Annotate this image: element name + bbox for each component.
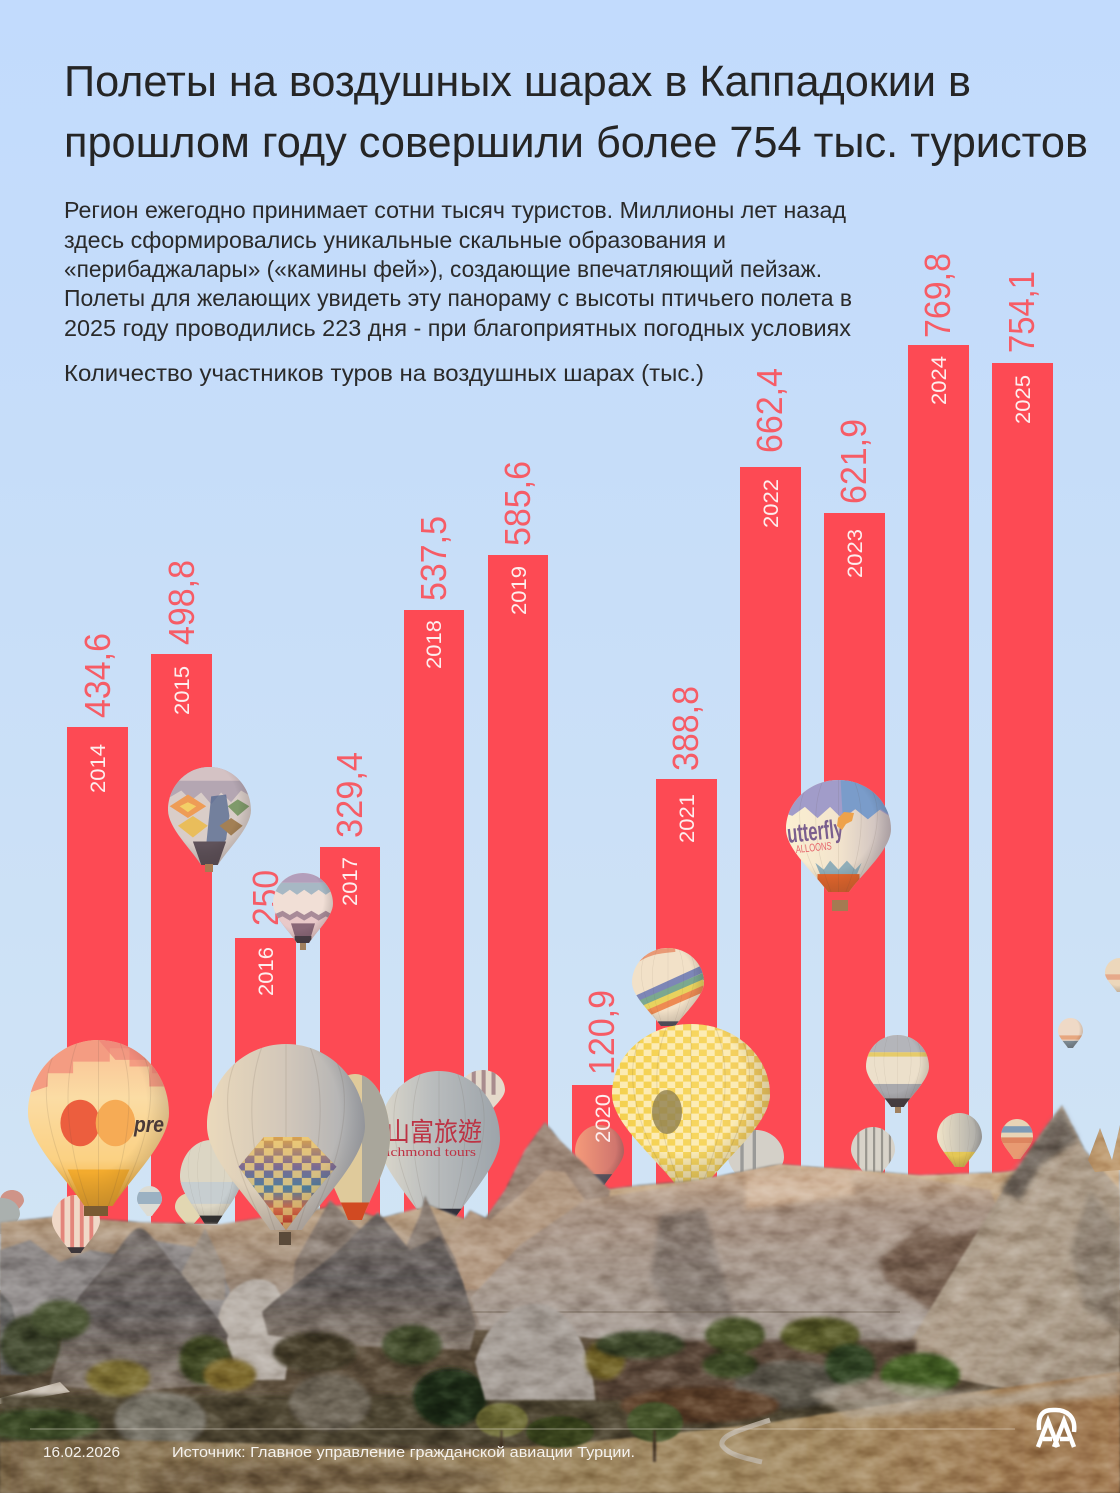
bar chart: value labels: 754,1 <box>1001 271 1042 353</box>
balloon: cream behind large <box>175 1194 200 1224</box>
intro text block: здесь сформировались уникальные скальные образования и <box>64 227 726 253</box>
balloon: rainbow stripes <box>632 948 704 1026</box>
balloon: striped small behind Chinese balloon <box>465 1070 505 1108</box>
massif dark shadows <box>650 1210 735 1325</box>
balloon basket <box>895 1107 901 1113</box>
balloon basket <box>84 1206 108 1216</box>
balloon: far left edge pink <box>0 1190 24 1209</box>
valley base <box>0 1290 1120 1493</box>
balloon basket <box>205 864 213 872</box>
balloon: silver striped <box>851 1127 895 1173</box>
horizontal strata line <box>470 1311 900 1313</box>
bar chart: value labels: 388,8 <box>665 686 706 771</box>
balloon: large beige with mosaic <box>207 1044 365 1245</box>
balloon basket <box>279 1232 291 1245</box>
balloon: small pink right <box>1058 1018 1083 1048</box>
grey rocks left <box>0 1240 230 1320</box>
far ridge <box>0 1160 1120 1330</box>
title: прошлом году совершили более 754 тыс. туристов <box>64 118 1088 167</box>
bar chart: year labels: 2017 <box>339 857 362 906</box>
balloon: striped small left <box>52 1195 100 1253</box>
ground darker patch <box>140 1462 500 1493</box>
balloon: striped blue-orange <box>1001 1119 1033 1159</box>
balloon: small left striped tiny <box>137 1186 162 1216</box>
balloon: large partner behind beige <box>334 1074 390 1220</box>
large right cone <box>905 1105 1120 1395</box>
bar chart: bars <box>67 345 1053 1230</box>
intro text block: Регион ежегодно принимает сотни тысяч туристов. Миллионы лет назад <box>64 197 846 223</box>
trees in foreground <box>476 1402 683 1462</box>
bar chart: value labels: 621,9 <box>833 419 874 504</box>
bar chart: value labels: 585,6 <box>497 461 538 546</box>
ground light slabs <box>810 1372 1120 1418</box>
bar chart: year labels: 2022 <box>760 479 783 528</box>
balloon lettering small: ALLOONS <box>795 840 832 856</box>
intro text block: «перибаджалары» («камины фей»), создающие впечатляющий пейзаж. <box>64 256 822 282</box>
balloon: Butterfly <box>786 780 891 911</box>
intro text block: Полеты для желающих увидеть эту панораму с высоты птичьего полета в <box>64 285 852 311</box>
rock left edge <box>0 1292 28 1375</box>
pale sliver at far left <box>0 1382 70 1404</box>
bar chart: year labels: 2023 <box>844 529 867 578</box>
footer rule <box>30 1428 1015 1430</box>
central rock massif <box>470 1164 1010 1350</box>
balloon emblem <box>652 1090 682 1134</box>
balloon: yellow checked <box>612 1024 770 1184</box>
balloon: small far right, cut off by edge <box>1105 958 1120 992</box>
bar chart: value labels: 498,8 <box>161 560 202 645</box>
intro text block <box>64 197 852 341</box>
bar chart: value labels: 120,9 <box>581 990 622 1075</box>
year label 2020: 2020 <box>592 1094 615 1143</box>
bar chart: year labels: 2021 <box>676 794 699 843</box>
central rock lit tops <box>745 1170 855 1210</box>
bar chart: value labels: 537,5 <box>413 516 454 601</box>
vegetation right <box>0 1317 960 1441</box>
bar chart: year labels <box>87 356 1035 996</box>
spires center <box>470 1122 610 1280</box>
bar chart: value labels: 329,4 <box>329 752 370 838</box>
bar chart: value labels: 434,6 <box>77 633 118 718</box>
bar chart: value labels: 250 <box>245 870 286 926</box>
icon: AA logo <box>1038 1410 1074 1447</box>
dark cone group centre-left <box>262 1212 476 1350</box>
balloon: large orange pre <box>28 1040 169 1216</box>
pale dome <box>218 1279 295 1380</box>
bar chart: year labels: 2025 <box>1012 375 1035 424</box>
balloon: orange behind 2020 <box>575 1125 624 1185</box>
balloon: behind center rock <box>728 1130 784 1173</box>
landscape: rock formations and valley <box>0 1105 1120 1493</box>
chart subtitle: Количество участников туров на воздушных шарах (тыс.) <box>64 360 704 386</box>
title: Полеты на воздушных шарах в Каппадокии в <box>64 57 971 106</box>
balloon lettering latin: richmond tours <box>381 1144 476 1159</box>
dome rock centre <box>475 1304 596 1400</box>
balloon basket <box>832 900 848 911</box>
bar chart: year labels: 2016 <box>255 947 278 996</box>
dirt path <box>722 1420 770 1462</box>
balloon: Chinese text richmond tours <box>386 1071 500 1217</box>
bar chart: year labels: 2015 <box>171 666 194 715</box>
dark cone left <box>50 1228 228 1392</box>
balloon: pink scalloped <box>273 873 333 950</box>
balloon lettering: 山富旅遊 <box>386 1112 482 1149</box>
balloon: checked cream <box>866 1035 929 1113</box>
bar chart: year labels: 2014 <box>87 744 110 793</box>
balloon: patterned mosaic blue <box>168 767 251 872</box>
balloon: cream blue mid-left <box>180 1140 242 1224</box>
intro text block: 2025 году проводились 223 дня - при благоприятных погодных условиях <box>64 315 851 341</box>
bar chart: year labels: 2019 <box>508 566 531 615</box>
balloon: pale small striped <box>937 1113 982 1167</box>
balloon lettering: utterfly <box>786 813 845 849</box>
balloon basket <box>300 943 306 950</box>
right distant spires <box>1088 1125 1120 1172</box>
balloon: far left edge grey <box>0 1198 20 1234</box>
tan cones mid <box>290 1195 470 1310</box>
bar chart: value labels: 662,4 <box>749 368 790 453</box>
ground <box>0 1372 1120 1493</box>
bar chart: value labels: 769,8 <box>917 253 958 338</box>
bar chart: year labels: 2024 <box>928 356 951 405</box>
title <box>64 57 1088 167</box>
footer date: 16.02.2026 <box>43 1444 120 1461</box>
balloon butterfly emblem <box>837 812 854 830</box>
bar chart: value labels <box>77 253 1042 1075</box>
vegetation <box>0 1300 900 1448</box>
bar chart: year labels: 2018 <box>423 620 446 669</box>
footer source: Источник: Главное управление гражданской авиации Турции. <box>172 1444 635 1461</box>
balloon lettering: pre <box>133 1112 164 1137</box>
